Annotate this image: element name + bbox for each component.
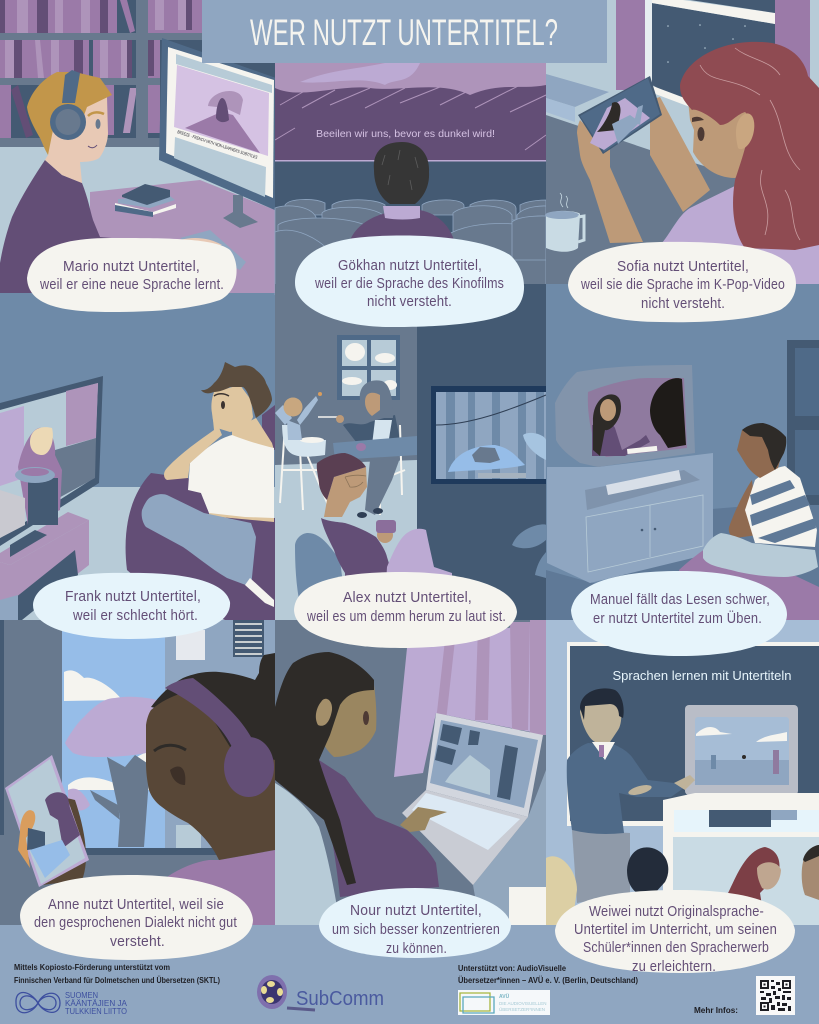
panel: Alex (275, 284, 546, 620)
logo: SubComm (257, 975, 384, 1010)
book stack (115, 184, 176, 217)
Boy (679, 423, 819, 620)
title banner (202, 0, 607, 63)
bubble: Gökhan: nicht versteht. (367, 294, 452, 310)
bubble: Frank (33, 573, 230, 639)
door (787, 340, 819, 505)
bubble: Sofia: weil sie die Sprache im K-Pop-Video (580, 277, 785, 293)
desk (90, 180, 275, 293)
bubble: Anne (20, 875, 253, 960)
bubble: Weiwei: Weiwei nutzt Originalsprache- (589, 904, 764, 920)
Anne head (146, 653, 275, 860)
logo: SKTL: SUOMEN (65, 990, 98, 1000)
more info label: Mehr Infos: (694, 1006, 738, 1015)
Mario person (0, 70, 246, 295)
board caption: Sprachen lernen mit Untertiteln (612, 668, 792, 683)
grey shelf (546, 74, 609, 107)
Sofia hair (680, 42, 819, 250)
Alex on chair (295, 453, 452, 605)
panel: Weiwei (546, 620, 819, 925)
logo: SKTL: TULKKIEN LIITTO (65, 1006, 127, 1016)
panel: Frank (0, 295, 275, 620)
coffee mug (545, 193, 584, 252)
title: WER NUTZT UNTERTITEL? (250, 12, 558, 53)
bubble: Alex: Alex nutzt Untertitel, (343, 590, 472, 606)
laptop (402, 713, 543, 885)
bubble: Nour: Nour nutzt Untertitel, (350, 903, 482, 919)
bubble: Sofia (568, 242, 796, 322)
sofa (126, 473, 275, 620)
bubble: Frank: weil er schlecht hört. (72, 608, 198, 624)
bubble: Nour (319, 888, 511, 958)
classroom TV (685, 705, 798, 795)
curtain (394, 620, 546, 777)
bubble: Alex (294, 572, 517, 648)
clouds (64, 670, 122, 701)
logo: AVÜ: DIE AUDIOVISUELLEN (499, 1001, 547, 1006)
bubble: Gökhan (295, 235, 524, 327)
Anne shirt (167, 850, 275, 925)
monitor (159, 38, 277, 228)
tablet (5, 755, 89, 887)
Sofia face (688, 90, 770, 178)
film subtitle: Beeilen wir uns, bevor es dunkel wird! (316, 128, 495, 140)
woman at table (318, 380, 417, 518)
footer funding text left: Finnischen Verband für Dolmetschen und Übersetzen (SKTL) (14, 976, 220, 985)
logo: SKTL (16, 990, 127, 1016)
footer funding text right: Unterstützt von: AudioVisuelle (458, 964, 567, 973)
panel: Gökhan (275, 63, 546, 295)
bubble: Mario: weil er eine neue Sprache lernt. (39, 277, 224, 293)
Sofia shirt (660, 181, 819, 284)
bubble: Anne: den gesprochenen Dialekt nicht gut (34, 915, 237, 931)
panel: Nour (275, 620, 546, 925)
bubble: Mario (27, 238, 237, 312)
baby in high chair (275, 392, 328, 510)
footer funding text left: Mittels Kopiosto-Förderung unterstützt vom (14, 963, 170, 972)
panel: Manuel (546, 284, 819, 620)
footer funding text right (458, 964, 638, 985)
bubble: Frank: Frank nutzt Untertitel, (65, 589, 201, 605)
window (616, 0, 810, 120)
panel: Anne (0, 620, 275, 925)
blackboard (567, 642, 819, 826)
logo: AVÜ: ÜBERSETZER*INNEN (499, 1006, 545, 1012)
students (546, 845, 819, 925)
logo: AVÜ: AVÜ (499, 993, 510, 1000)
logo: SKTL: KÄÄNTÄJIEN JA (65, 998, 127, 1008)
shelf (0, 512, 89, 620)
bubble: Sofia: Sofia nutzt Untertitel, (617, 259, 749, 275)
logo: SubComm: SubComm (296, 988, 384, 1010)
footer funding text left (14, 963, 220, 985)
bubble: Mario: Mario nutzt Untertitel, (63, 259, 200, 275)
Sofia arms (577, 97, 710, 243)
footer funding text right: Übersetzer*innen – AVÜ e. V. (Berlin, Deutschland) (458, 976, 638, 985)
viewer from behind (350, 142, 454, 240)
bubble: Weiwei: zu erleichtern. (632, 959, 716, 975)
QR code (756, 976, 795, 1015)
bubble: Nour: zu können. (386, 941, 447, 957)
bubble: Weiwei (555, 890, 795, 975)
Frank person (142, 362, 274, 607)
monitor: BREEZE · FRENCH WITH NON-LEARNERS SUBTITLES (177, 129, 258, 160)
window with clouds (337, 335, 400, 400)
bubble: Alex: weil es um demm herum zu laut ist. (306, 609, 506, 625)
bubble: Weiwei: Untertitel im Unterricht, um seinen (574, 922, 777, 938)
grey fabric and white floor (473, 770, 546, 925)
chair back (275, 783, 340, 925)
wall TV (431, 386, 546, 484)
bubble: Nour: um sich besser konzentrieren (332, 922, 500, 938)
phone with K-pop video (578, 76, 662, 154)
Nour person (275, 652, 447, 897)
teacher (567, 688, 695, 903)
bubble: Sofia: nicht versteht. (641, 296, 725, 312)
TV cabinet (547, 453, 713, 583)
CRT TV (555, 365, 695, 467)
blossom tree (65, 697, 157, 847)
bubble: Anne: versteht. (110, 934, 165, 950)
bubble: Anne: Anne nutzt Untertitel, weil sie (48, 897, 224, 913)
bubble: Gökhan: Gökhan nutzt Untertitel, (338, 258, 482, 274)
bubble: Manuel (571, 571, 787, 656)
panel: Mario (0, 0, 277, 320)
bubble: Weiwei: Schüler*innen den Spracherwerb (583, 940, 769, 956)
TV (0, 376, 103, 557)
cinema seats (275, 199, 546, 295)
bubble: Manuel: er nutzt Untertitel zum Üben. (593, 609, 762, 627)
white cabinet (663, 793, 819, 925)
bubble: Gökhan: weil er die Sprache des Kinofilms (314, 276, 504, 292)
panel: Sofia (545, 0, 819, 295)
bubble: Manuel: Manuel fällt das Lesen schwer, (590, 592, 770, 608)
logo: AVÜ (458, 990, 550, 1015)
